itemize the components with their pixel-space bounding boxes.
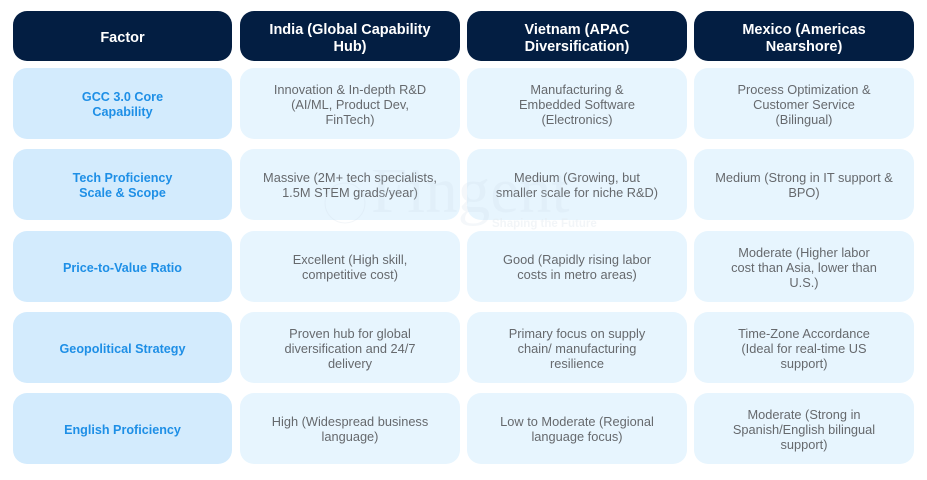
header: Mexico: Mexico (Americas <box>742 22 866 38</box>
header: India: Hub) <box>333 39 366 55</box>
India: English proficiency: language) <box>322 429 378 444</box>
Mexico: tech proficiency: Medium (Strong in IT support & <box>715 170 893 185</box>
India: core capability: FinTech) <box>325 112 375 126</box>
Mexico: core capability: (Bilingual) <box>776 112 832 126</box>
Vietnam: tech proficiency: smaller scale for niche R&D) <box>496 185 658 200</box>
Vietnam: English proficiency: language focus) <box>531 429 623 444</box>
factor: Tech Proficiency Scale & Scope: Scale & Scope <box>79 186 166 200</box>
Mexico: price to value: Moderate (Higher labor <box>738 244 870 260</box>
Vietnam: English proficiency <box>467 393 687 464</box>
Mexico: geopolitical strategy <box>694 312 914 383</box>
India: geopolitical strategy: Proven hub for global <box>289 326 411 340</box>
India: English proficiency: High (Widespread business <box>272 414 428 429</box>
Mexico: English proficiency <box>694 393 914 464</box>
factor: Price-to-Value Ratio: Price-to-Value Ratio <box>63 260 182 274</box>
India: geopolitical strategy <box>240 312 460 383</box>
watermark: Fingent logo: Shaping the Future <box>492 218 597 230</box>
factor: English Proficiency: English Proficiency <box>64 422 181 436</box>
factor: Price-to-Value Ratio <box>13 231 232 302</box>
Mexico: tech proficiency: BPO) <box>788 185 820 200</box>
Vietnam: price to value: costs in metro areas) <box>517 267 637 282</box>
Vietnam: geopolitical strategy: Primary focus on supply <box>509 326 645 340</box>
India: geopolitical strategy: diversification and 24/7 <box>285 340 415 356</box>
factor: Tech Proficiency Scale & Scope <box>13 149 232 220</box>
factor: GCC 3.0 Core Capability: Capability <box>92 105 153 119</box>
Mexico: core capability: Process Optimization & <box>738 82 870 96</box>
India: geopolitical strategy: delivery <box>328 356 372 370</box>
Vietnam: core capability: (Electronics) <box>541 112 613 126</box>
India: core capability <box>240 68 460 139</box>
Mexico: geopolitical strategy: support) <box>781 356 827 370</box>
watermark: Fingent logo <box>326 170 597 230</box>
Mexico: English proficiency: support) <box>781 436 827 452</box>
Vietnam: core capability: Embedded Software <box>519 96 635 112</box>
Vietnam: geopolitical strategy <box>467 312 687 383</box>
Vietnam: core capability <box>467 68 687 139</box>
India: price to value <box>240 231 460 302</box>
header: Factor <box>13 11 232 61</box>
factor: Tech Proficiency Scale & Scope: Tech Proficiency <box>73 171 172 185</box>
factor: Geopolitical Strategy: Geopolitical Strategy <box>60 342 185 356</box>
header: Vietnam: Vietnam (APAC <box>524 22 630 38</box>
India: tech proficiency: 1.5M STEM grads/year) <box>282 185 418 200</box>
Mexico: price to value: cost than Asia, lower than <box>731 260 877 274</box>
India: English proficiency <box>240 393 460 464</box>
India: tech proficiency <box>240 149 460 220</box>
Vietnam: price to value <box>467 231 687 302</box>
header: Vietnam: Diversification) <box>525 39 629 55</box>
India: tech proficiency: Massive (2M+ tech specialists, <box>263 170 437 185</box>
factor: GCC 3.0 Core Capability: GCC 3.0 Core <box>82 90 163 104</box>
factor: Geopolitical Strategy <box>13 312 232 383</box>
header: Factor: Factor <box>100 30 145 46</box>
India: price to value: competitive cost) <box>302 267 398 282</box>
Vietnam: tech proficiency <box>467 149 687 220</box>
Vietnam: English proficiency: Low to Moderate (Regional <box>500 414 654 429</box>
header: Mexico <box>694 11 914 61</box>
factor: GCC 3.0 Core Capability <box>13 68 232 139</box>
Mexico: tech proficiency <box>694 149 914 220</box>
Mexico: geopolitical strategy: (Ideal for real-time US <box>741 340 867 356</box>
header: India: India (Global Capability <box>269 22 431 38</box>
India: core capability: (AI/ML, Product Dev, <box>291 96 409 112</box>
Mexico: price to value: U.S.) <box>789 274 819 290</box>
Vietnam: core capability: Manufacturing & <box>530 82 624 96</box>
factor: English Proficiency <box>13 393 232 464</box>
India: price to value: Excellent (High skill, <box>293 252 407 267</box>
header: Mexico: Nearshore) <box>766 39 842 55</box>
Mexico: core capability: Customer Service <box>753 96 855 112</box>
Mexico: geopolitical strategy: Time-Zone Accordance <box>738 326 870 340</box>
Mexico: English proficiency: Spanish/English bilingual <box>733 422 875 436</box>
header: India <box>240 11 460 61</box>
header: Vietnam <box>467 11 687 61</box>
Mexico: price to value <box>694 231 914 302</box>
Vietnam: tech proficiency: Medium (Growing, but <box>514 170 640 185</box>
Mexico: core capability <box>694 68 914 139</box>
India: core capability: Innovation & In-depth R&D <box>274 82 426 96</box>
Vietnam: geopolitical strategy: resilience <box>550 356 604 370</box>
Vietnam: price to value: Good (Rapidly rising labor <box>503 252 651 267</box>
Mexico: English proficiency: Moderate (Strong in <box>747 406 861 422</box>
Vietnam: geopolitical strategy: chain/ manufacturing <box>518 340 636 356</box>
